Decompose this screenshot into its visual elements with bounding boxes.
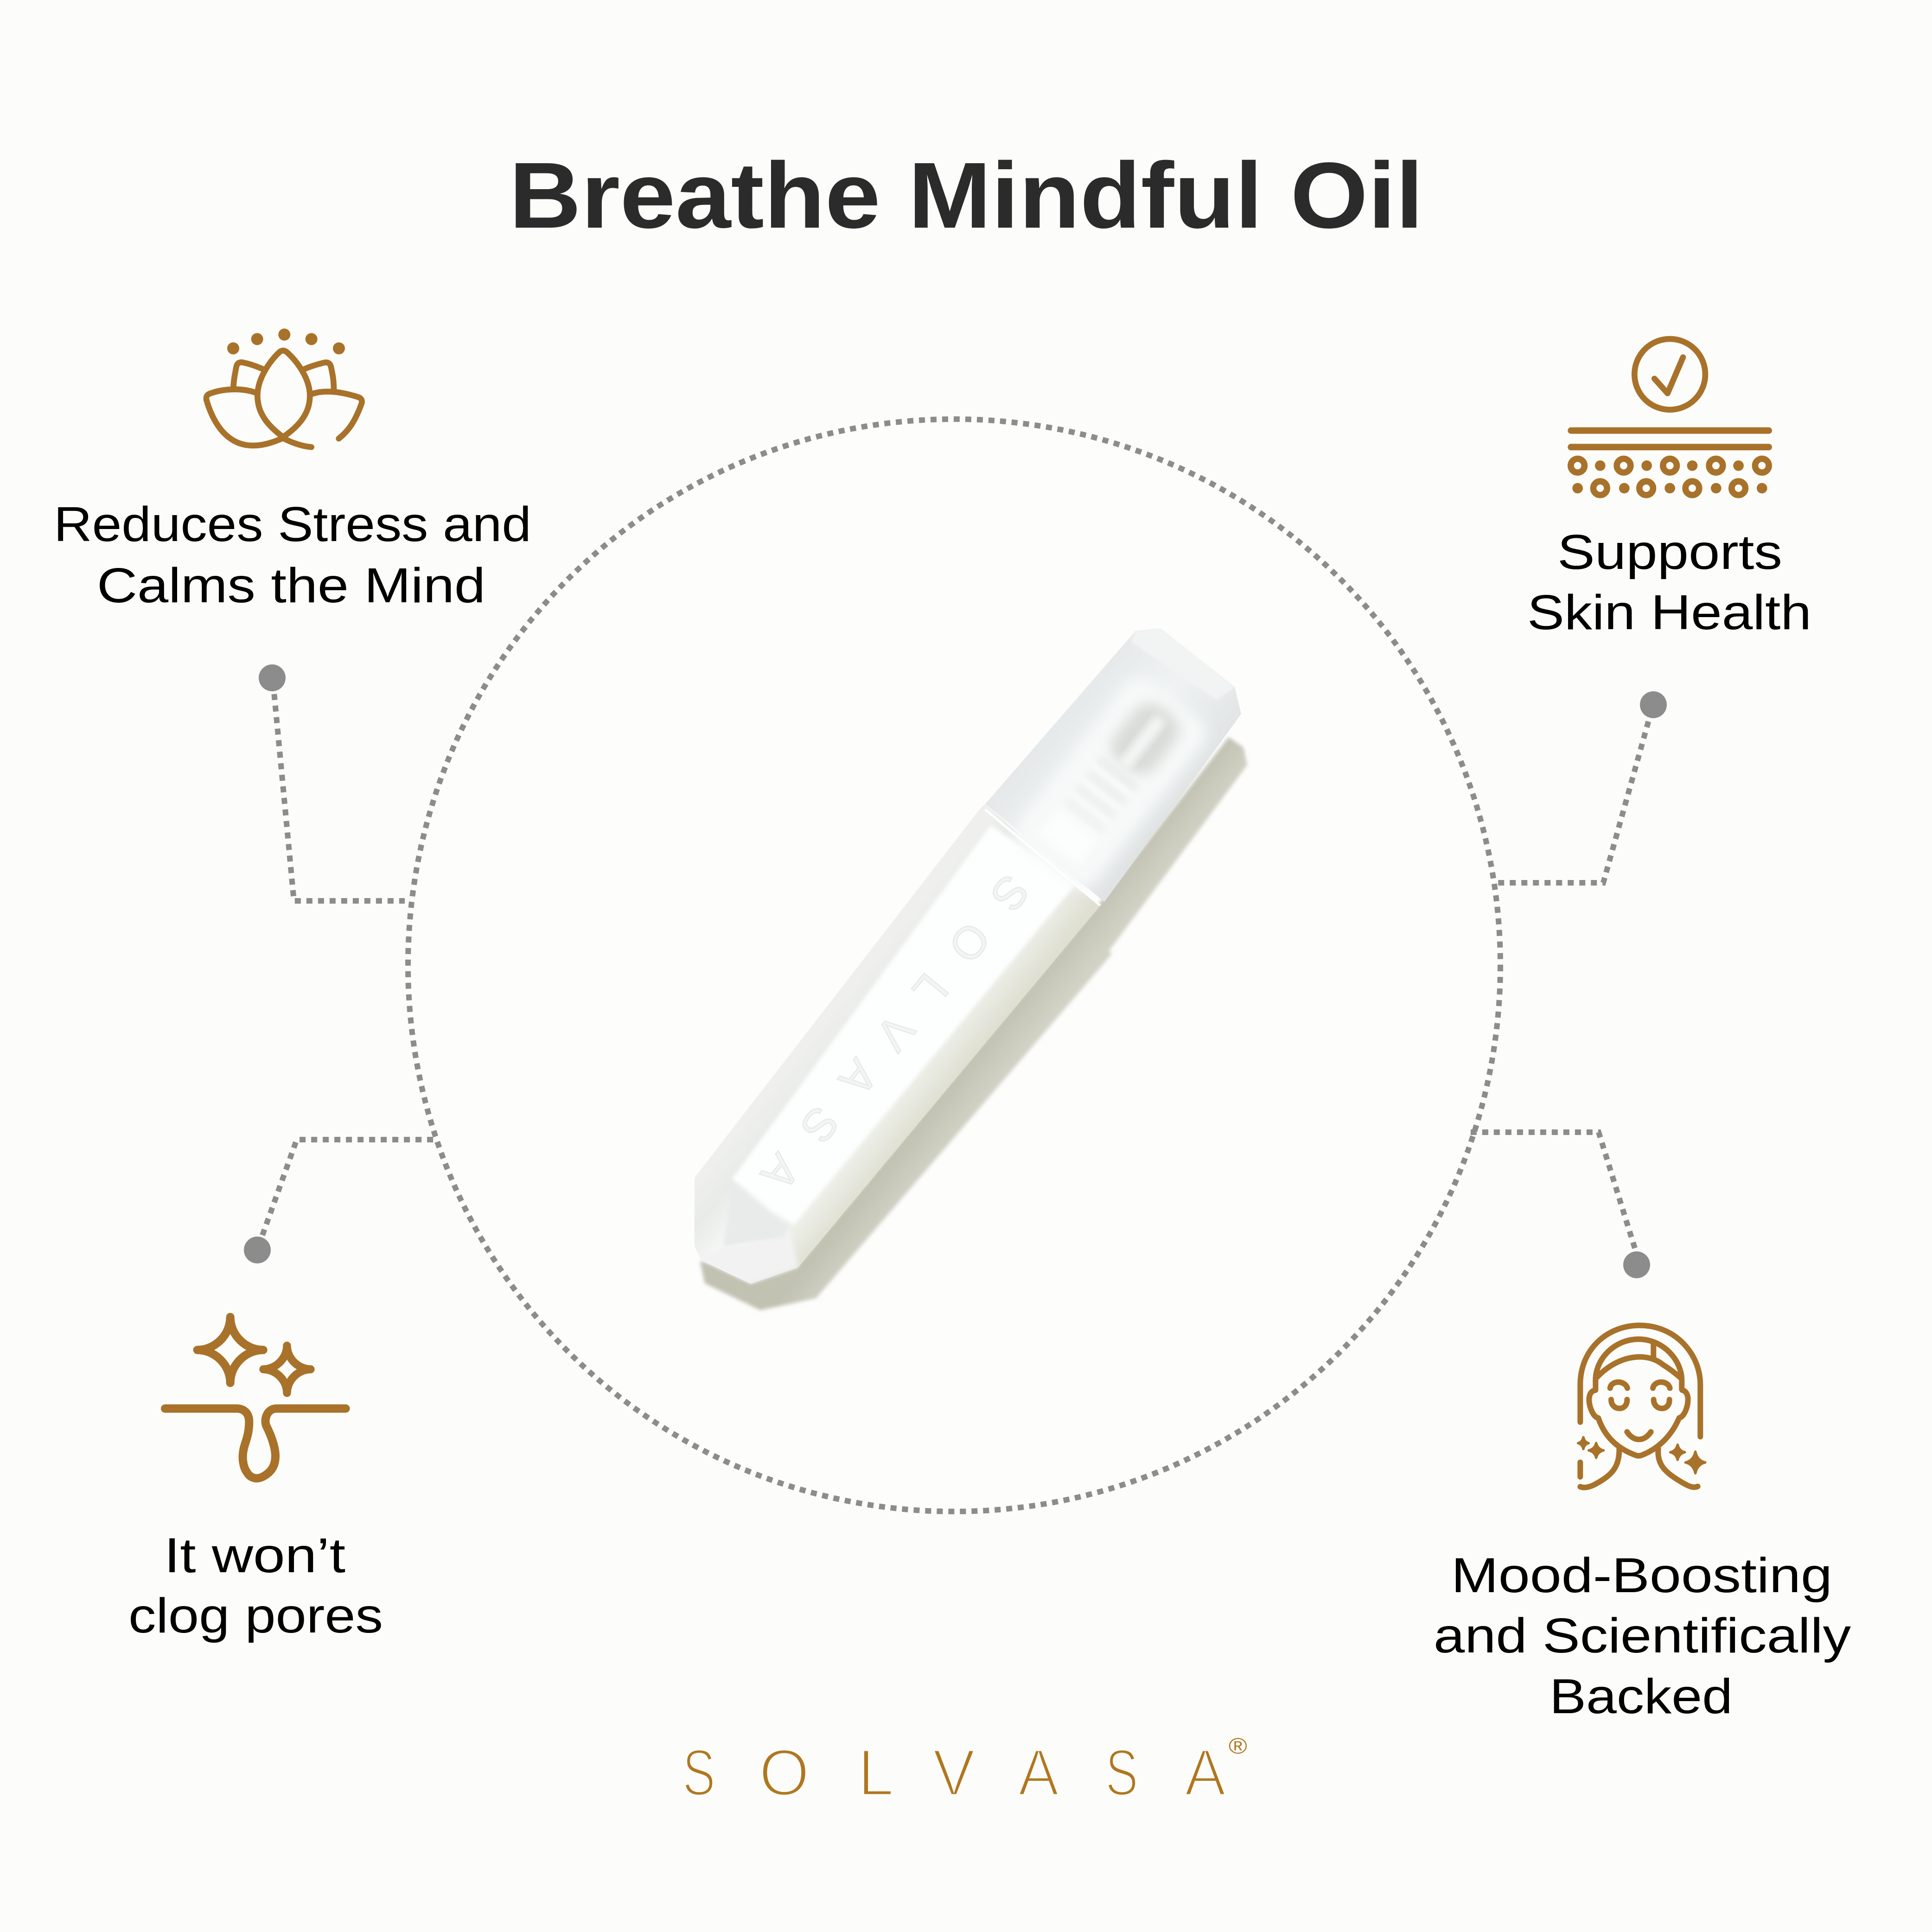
cap inner window with brush: [1008, 670, 1213, 895]
connector: mood benefit to circle: [1471, 1132, 1650, 1278]
bottle tip lower band: [701, 1226, 798, 1284]
dotted circle around product: [408, 419, 1500, 1511]
brand logo: V: [933, 1736, 975, 1810]
text: mood boosting: and Scientifically: [1434, 1608, 1851, 1663]
embossed brand on bottle: SOLVASA: [752, 866, 1039, 1200]
bottle shadow: [700, 737, 1247, 1310]
text: mood boosting: Backed: [1549, 1669, 1733, 1724]
cap top facet: [1131, 629, 1235, 700]
brand logo: A: [1185, 1736, 1226, 1810]
brand logo: L: [858, 1736, 894, 1810]
bottle body: [695, 804, 1100, 1284]
connector: skin benefit to circle: [1494, 691, 1667, 883]
bottle front panel: [732, 825, 1076, 1225]
bottle cap: [985, 629, 1241, 902]
product: frosted roller bottle: [695, 629, 1247, 1310]
text: won't clog pores: clog pores: [128, 1588, 383, 1643]
text: reduces stress: Calms the Mind: [97, 558, 485, 613]
text: won't clog pores: [128, 1528, 383, 1643]
seam between cap and body: [985, 810, 1100, 905]
brand logo: A: [1018, 1736, 1059, 1810]
title: Breathe Mindful Oil: [509, 143, 1423, 248]
text: mood boosting: [1434, 1548, 1851, 1724]
text: won't clog pores: It won’t: [164, 1528, 345, 1583]
bottle tip facet: [723, 1182, 790, 1247]
text: mood boosting: Mood-Boosting: [1451, 1548, 1832, 1603]
brand logo: O: [759, 1736, 810, 1810]
brand logo: [682, 1734, 1247, 1810]
brand logo: ®: [1229, 1734, 1247, 1759]
text: reduces stress: Reduces Stress and: [54, 497, 531, 552]
icon: clean pore with sparkles: [165, 1317, 346, 1478]
text: supports skin health: [1527, 525, 1811, 640]
brand logo: S: [1105, 1736, 1138, 1810]
text: supports skin health: Skin Health: [1527, 585, 1811, 640]
icon: lotus: [206, 329, 362, 447]
text: reduces stress: [54, 497, 531, 613]
icon: skin layers with check: [1571, 339, 1769, 495]
brand logo: S: [682, 1736, 715, 1810]
icon: glowing face: [1578, 1326, 1705, 1487]
connector: pores benefit to circle: [244, 1140, 435, 1263]
text: supports skin health: Supports: [1557, 525, 1782, 580]
connector: stress benefit to circle: [259, 664, 405, 901]
